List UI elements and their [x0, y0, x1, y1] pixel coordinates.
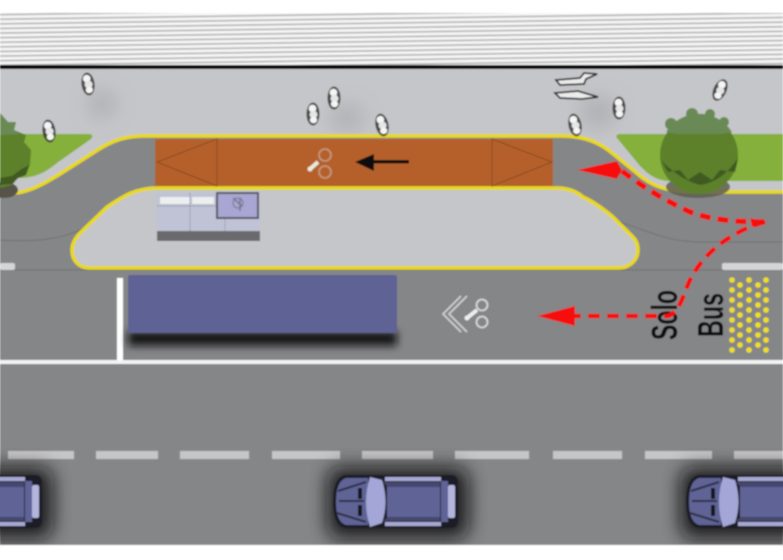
tree right [660, 108, 738, 198]
right triangle marking [492, 139, 552, 186]
car right [680, 467, 783, 539]
road turn guide lines [0, 222, 783, 270]
bottom page margin [0, 545, 783, 560]
car centre [327, 467, 469, 539]
curb: top yellow line [0, 136, 783, 193]
shelter bike sign [217, 193, 258, 218]
stop line [117, 278, 123, 362]
building edge [0, 65, 783, 69]
bike lane chevrons [443, 296, 467, 332]
road surface [0, 136, 783, 545]
road text: Solo: Solo [644, 290, 685, 340]
car left [0, 467, 53, 539]
pedestrians [41, 72, 731, 143]
tree left [0, 113, 31, 198]
sidewalk [0, 69, 783, 204]
centre lane dashes [8, 451, 783, 459]
left lawn [0, 134, 92, 178]
red arrow: route to bike lane [537, 218, 767, 326]
black direction arrow [355, 154, 409, 171]
bus shelter [157, 193, 260, 241]
road dash right [722, 263, 783, 270]
red arrow: route to bike crossing [577, 161, 767, 222]
orange bike crossing [155, 139, 553, 186]
pedestrians lying group [555, 73, 598, 99]
bus [128, 275, 397, 333]
building roof hatch [0, 13, 783, 65]
bike symbol on crossing [308, 149, 331, 178]
road dash left [0, 263, 15, 270]
bus stop island [72, 188, 638, 268]
tactile yellow dots [729, 277, 769, 353]
lane edge line [0, 360, 783, 364]
bus shadow [128, 331, 397, 346]
left triangle marking [157, 139, 217, 186]
road text: Bus: Bus [690, 293, 731, 337]
bike lane symbol [464, 300, 488, 328]
sidewalk soft shadows [88, 90, 616, 132]
right lawn [616, 134, 783, 181]
